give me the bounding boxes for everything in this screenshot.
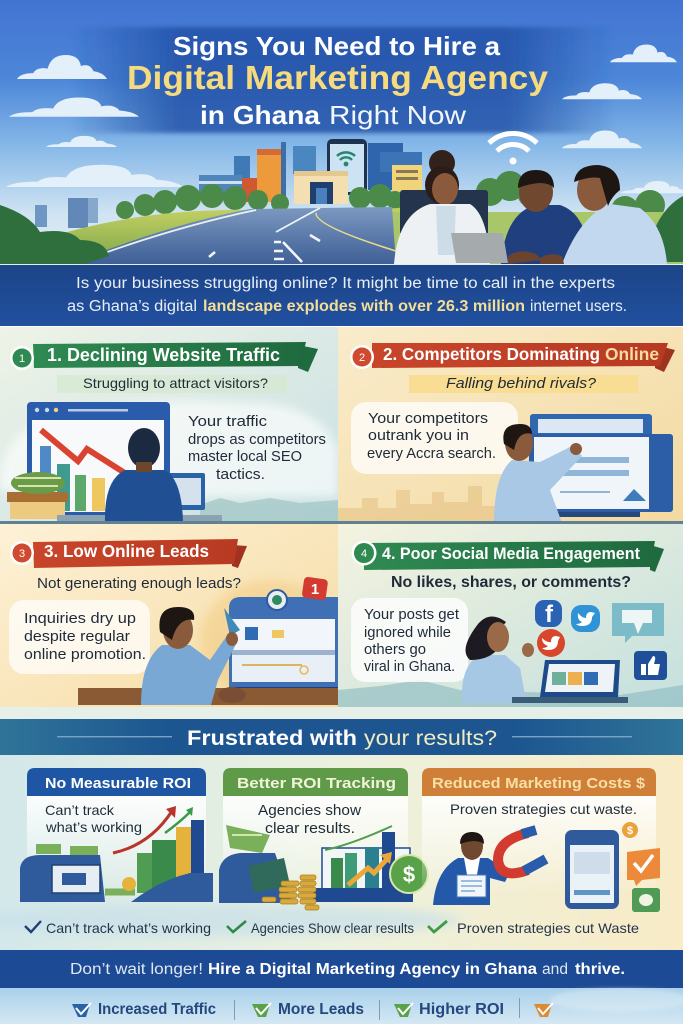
title: Right Now — [329, 100, 466, 130]
pale strip — [0, 707, 683, 720]
icon: thumbs up — [634, 651, 667, 680]
card: better ROI tracking: Agencies show — [258, 803, 362, 819]
icon: dislike speech bubble — [612, 603, 664, 643]
icon: twitter bubble — [571, 605, 600, 632]
ribbon heading: 2 — [359, 352, 365, 364]
checklist row — [25, 920, 639, 936]
title: Signs You Need to Hire a — [173, 31, 501, 61]
magnet — [498, 830, 546, 873]
icon: orange check bubble — [627, 848, 660, 886]
faint skyline — [338, 680, 683, 707]
subheading — [57, 375, 287, 393]
card: better ROI tracking — [219, 768, 428, 910]
icon: dollar coin — [390, 855, 428, 893]
laptop — [168, 473, 205, 510]
subheading: Struggling to attract visitors? — [83, 375, 268, 391]
desk — [57, 515, 222, 522]
card: reduced marketing costs — [422, 768, 660, 912]
title band — [70, 27, 615, 133]
icon: facebook bubble — [535, 600, 562, 628]
social text: Your posts get — [364, 607, 459, 623]
ribbon heading: 1 — [19, 353, 25, 365]
icon: red bird bubble — [537, 629, 565, 657]
cash machine — [219, 825, 292, 903]
people: three colleagues — [394, 150, 667, 264]
check 2: Agencies Show clear results — [251, 921, 414, 936]
card: reduced marketing costs: Reduced Marketing Costs $ — [432, 775, 646, 792]
panel: 3 low online leads — [0, 524, 340, 707]
woman — [462, 616, 534, 703]
check 3: Proven strategies cut Waste — [457, 920, 639, 936]
gate building — [294, 171, 348, 204]
ribbon heading: Online — [605, 344, 659, 364]
leads text: online promotion. — [24, 646, 146, 663]
competitors text — [367, 411, 496, 462]
cash machine — [20, 849, 136, 902]
intro band: landscape explodes with over 26.3 million — [203, 298, 525, 315]
person from behind — [105, 428, 183, 522]
icon: white wifi — [489, 133, 537, 164]
subheading: Not generating enough leads? — [37, 575, 241, 592]
ribbon heading — [352, 540, 664, 572]
panel: results section — [0, 755, 683, 950]
monitor chart — [313, 826, 413, 902]
blue device — [131, 873, 213, 902]
desk — [78, 688, 338, 705]
intro band: as Ghana’s digital — [67, 298, 197, 315]
card: no measurable ROI: No Measurable ROI — [45, 775, 191, 792]
bars and arrows — [113, 806, 204, 893]
social text: ignored while — [364, 625, 451, 641]
woman — [394, 150, 490, 264]
arrow cursor — [224, 608, 240, 636]
title: Digital Marketing Agency — [127, 59, 549, 96]
competitors text: Your competitors — [368, 411, 488, 427]
traffic text — [188, 414, 326, 483]
intro band: Is your business struggling online? It might be time to call in the experts — [76, 275, 615, 292]
card: no measurable ROI — [20, 768, 213, 902]
leads text: despite regular — [24, 628, 130, 645]
man centre — [501, 170, 590, 264]
leads text — [24, 610, 146, 663]
competitors text: every Accra search. — [367, 446, 496, 462]
bubble — [351, 598, 468, 682]
benefit: orange check — [534, 1003, 553, 1017]
faint skyline — [338, 486, 540, 522]
icon: facebook bubble: f — [545, 601, 554, 628]
traffic text: master local SEO — [188, 449, 302, 465]
bubble — [9, 600, 150, 674]
call to action band: Hire a Digital Marketing Agency in Ghana — [208, 961, 537, 978]
competitors text: outrank you in — [368, 428, 469, 444]
website window — [229, 590, 338, 690]
call to action band — [0, 950, 683, 988]
person — [141, 607, 246, 705]
bubble: traffic text background — [0, 401, 338, 498]
warm glow — [200, 580, 340, 700]
ribbon heading: 4. Poor Social Media Engagement — [382, 544, 640, 563]
traffic text: tactics. — [216, 467, 265, 483]
person pointing — [494, 424, 582, 523]
laptop — [451, 233, 508, 263]
ribbon heading — [10, 342, 318, 372]
icon: dollar coin: $ — [403, 862, 415, 887]
man right — [562, 165, 667, 264]
businessman — [433, 832, 510, 905]
ribbon heading: 3 — [19, 548, 25, 560]
subheading — [409, 375, 638, 393]
icon: phone with wifi — [327, 139, 367, 195]
faint skyline — [200, 498, 338, 522]
notification badge: 1 — [311, 581, 319, 598]
ribbon heading — [350, 343, 675, 372]
check 1: Can’t track what’s working — [46, 920, 211, 936]
phone — [565, 830, 619, 909]
coin stacks — [262, 875, 319, 910]
title — [127, 31, 549, 130]
panel: 1 declining website traffic — [0, 327, 338, 523]
social text: viral in Ghana. — [364, 659, 455, 675]
frustrated heading band — [0, 719, 683, 755]
subheading: Falling behind rivals? — [446, 376, 597, 392]
intro band: internet users. — [530, 298, 627, 315]
icon: coin — [622, 822, 638, 838]
ribbon heading: 4 — [361, 548, 367, 560]
icon: green tile — [632, 888, 660, 912]
frustrated heading band: your results? — [364, 727, 497, 750]
ribbon heading: 2. Competitors Dominating — [383, 344, 600, 364]
title: in Ghana — [200, 100, 321, 130]
social text — [364, 607, 459, 675]
icon: coin: $ — [627, 825, 633, 837]
benefit: more leads: More Leads — [278, 1001, 364, 1018]
panel: 4 poor social media engagement — [338, 524, 683, 707]
ribbon heading: 3. Low Online Leads — [44, 541, 209, 561]
card: no measurable ROI: what’s working — [45, 819, 142, 835]
bushes — [0, 196, 683, 264]
divider — [0, 521, 683, 524]
traffic text: drops as competitors — [188, 432, 326, 448]
plant pot with money — [7, 472, 68, 519]
ribbon heading — [10, 539, 247, 568]
intro band — [0, 265, 683, 326]
call to action band: and — [542, 961, 568, 978]
card: better ROI tracking: clear results. — [265, 821, 355, 837]
call to action band: Don’t wait longer! — [70, 961, 203, 978]
notification badge — [302, 576, 328, 601]
card: no measurable ROI: Can’t track — [45, 802, 115, 818]
card: reduced marketing costs: Proven strategies cut waste. — [450, 801, 637, 817]
hands — [508, 251, 564, 264]
card: better ROI tracking: Better ROI Tracking — [237, 775, 396, 792]
social text: others go — [364, 642, 426, 658]
chart window — [27, 402, 170, 516]
city skyline — [35, 139, 422, 228]
subheading: No likes, shares, or comments? — [391, 574, 631, 591]
footer benefits — [0, 988, 683, 1024]
ground haze — [0, 904, 460, 936]
call to action band: thrive. — [575, 961, 625, 978]
traffic text: Your traffic — [188, 414, 267, 430]
background: sky — [0, 0, 683, 266]
landscape: trees and hills — [30, 171, 683, 264]
clouds — [6, 44, 683, 193]
search browser window — [529, 414, 673, 517]
bubble — [351, 402, 518, 474]
frustrated heading band: Frustrated with — [187, 727, 357, 750]
leads text: Inquiries dry up — [24, 610, 136, 627]
benefit: increased traffic: Increased Traffic — [98, 1001, 216, 1018]
chair — [400, 190, 488, 235]
ribbon heading: 1. Declining Website Traffic — [47, 345, 280, 365]
road — [70, 207, 396, 264]
benefit: higher ROI: Higher ROI — [419, 1001, 504, 1018]
laptop — [512, 660, 628, 703]
panel: 2 competitors dominating online — [338, 327, 683, 523]
